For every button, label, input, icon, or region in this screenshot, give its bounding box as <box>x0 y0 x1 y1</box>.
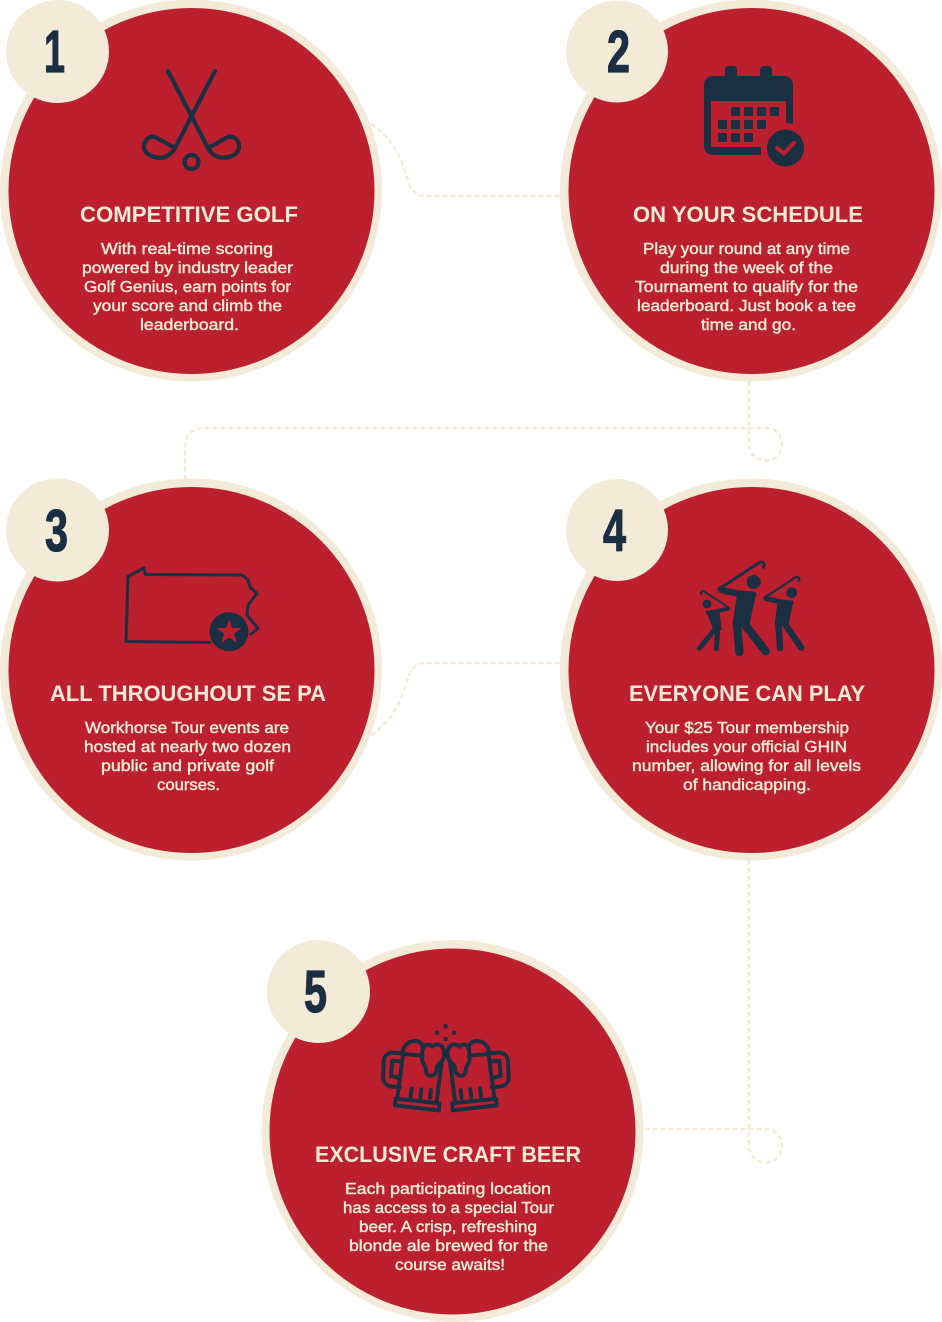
text block: Golf Genius, earn points for <box>84 279 292 296</box>
panel: competitive golf <box>0 0 382 382</box>
text block: course awaits! <box>395 1257 505 1274</box>
text block <box>84 720 291 794</box>
text block: during the week of the <box>660 260 833 277</box>
panel: on your schedule <box>560 0 942 382</box>
icon: crossed golf clubs <box>144 71 239 169</box>
text block: hosted at nearly two dozen <box>84 739 291 756</box>
heading: COMPETITIVE GOLF <box>80 202 298 227</box>
heading: EXCLUSIVE CRAFT BEER <box>315 1142 581 1167</box>
text block: includes your official GHIN <box>646 739 847 756</box>
text block: Your $25 Tour membership <box>645 720 849 737</box>
text block: Workhorse Tour events are <box>85 720 289 737</box>
text block: your score and climb the <box>93 298 282 315</box>
text block <box>632 720 861 794</box>
connector: step 1 to step 2 <box>371 124 561 196</box>
icon: Pennsylvania map with star <box>126 568 258 651</box>
icon: three golfers <box>699 562 801 652</box>
text block: Play your round at any time <box>643 241 850 258</box>
text block: has access to a special Tour <box>343 1200 555 1217</box>
badge: number 5: 5 <box>304 959 327 1025</box>
text block: Tournament to qualify for the <box>635 279 858 296</box>
badge: number 1: 1 <box>44 19 65 85</box>
heading: EVERYONE CAN PLAY <box>629 681 865 706</box>
text block: leaderboard. Just book a tee <box>637 298 856 315</box>
text block: leaderboard. <box>140 317 239 334</box>
badge: number 1 <box>6 0 109 103</box>
badge: number 4 <box>566 479 668 581</box>
text block <box>82 241 294 334</box>
badge: number 3: 3 <box>45 498 68 564</box>
connector: step 4 to step 5 <box>643 860 782 1162</box>
icon: calendar with check <box>704 66 804 166</box>
text block: number, allowing for all levels <box>632 758 861 775</box>
panel: exclusive craft beer <box>262 940 644 1322</box>
panel: everyone can play <box>560 478 942 860</box>
badge: number 5 <box>267 940 370 1043</box>
panel: all throughout SE PA <box>0 478 382 860</box>
text block: powered by industry leader <box>82 260 294 277</box>
text block: of handicapping. <box>683 777 811 794</box>
badge: number 2 <box>566 0 668 102</box>
text block: With real-time scoring <box>101 241 273 258</box>
text block <box>635 241 858 334</box>
badge: number 4: 4 <box>603 498 626 564</box>
text block: Each participating location <box>345 1181 551 1198</box>
icon: clinking beer mugs <box>383 1024 509 1110</box>
heading: ALL THROUGHOUT SE PA <box>50 681 326 706</box>
badge: number 3 <box>6 478 109 582</box>
text block: time and go. <box>701 317 796 334</box>
text block: courses. <box>157 777 220 794</box>
heading: ON YOUR SCHEDULE <box>633 202 863 227</box>
text block: public and private golf <box>101 758 275 775</box>
text block: beer. A crisp, refreshing <box>359 1219 537 1236</box>
text block <box>343 1181 555 1274</box>
connector: step 2 to step 3 <box>185 381 782 479</box>
text block: blonde ale brewed for the <box>349 1238 548 1255</box>
connector: step 3 to step 4 <box>371 663 561 735</box>
badge: number 2: 2 <box>607 19 630 85</box>
